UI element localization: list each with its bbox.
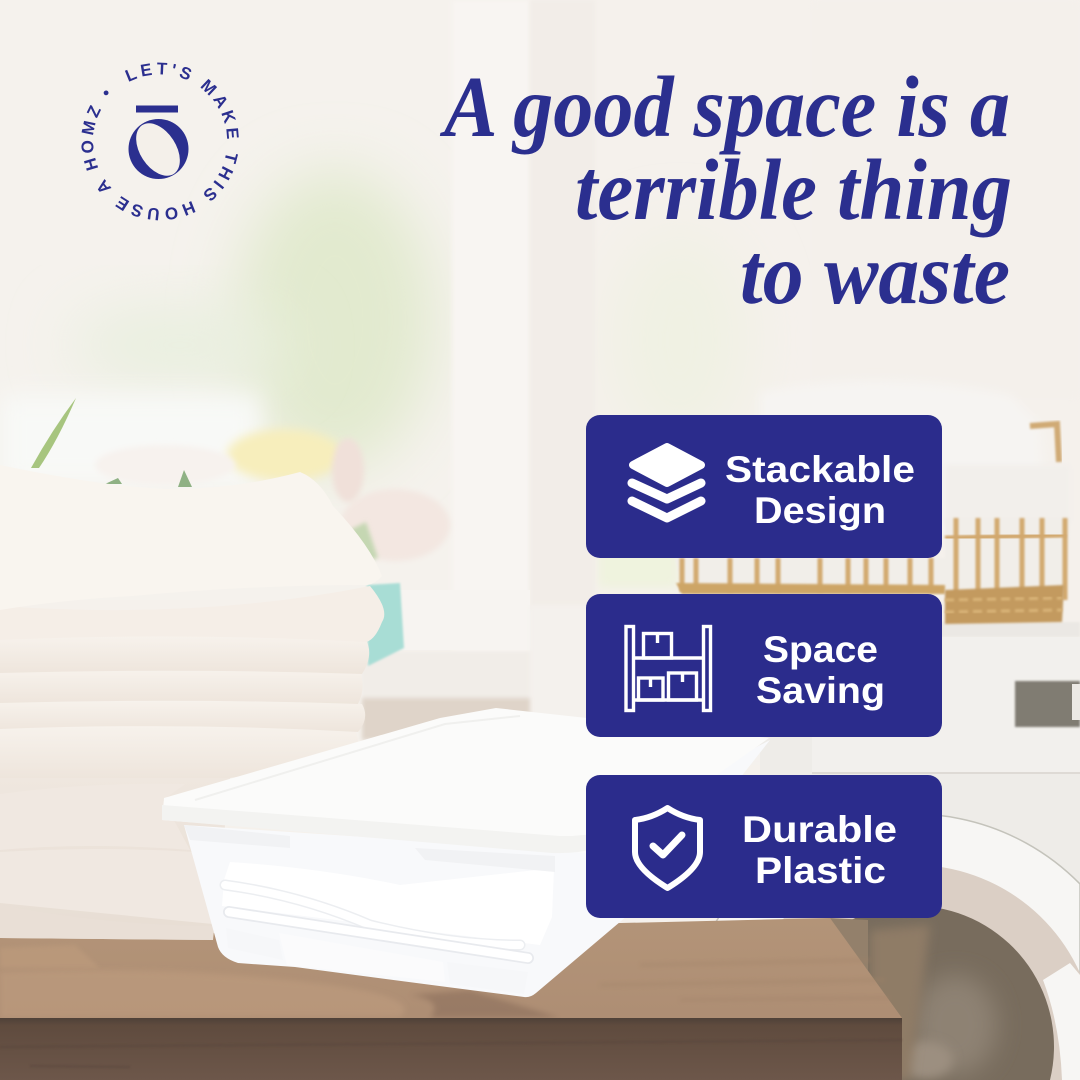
icon: stacked layers — [632, 447, 701, 518]
icon: warehouse shelf with boxes — [626, 626, 710, 710]
folded white sheets — [222, 862, 554, 958]
label — [756, 629, 885, 711]
label: Design — [754, 490, 886, 531]
box body — [184, 740, 770, 997]
box handles — [226, 928, 528, 994]
panel: space saving — [586, 594, 942, 737]
label: Space — [763, 629, 878, 670]
headline: A good space is a — [439, 58, 1010, 155]
headline — [439, 58, 1012, 322]
label — [742, 809, 897, 891]
headline: terrible thing — [575, 141, 1012, 238]
logo badge — [81, 62, 239, 220]
washing machine — [679, 622, 1080, 1080]
table — [0, 918, 902, 1080]
label: Plastic — [755, 850, 886, 891]
icon: shield with check — [635, 808, 700, 888]
label: Durable — [742, 809, 897, 850]
label: Stackable — [725, 449, 915, 490]
stack of folded towels — [0, 465, 384, 940]
box lid — [162, 708, 769, 872]
laundry basket — [675, 381, 1070, 624]
logo ring text: LET'S MAKE THIS HOUSE A HOMZ • — [81, 62, 239, 220]
panel: durable plastic — [586, 775, 942, 918]
logo mark — [127, 106, 189, 184]
label: Saving — [756, 670, 885, 711]
label — [725, 449, 915, 531]
headline: to waste — [740, 225, 1010, 322]
plastic storage box with white sheets — [162, 708, 770, 997]
flowers and vase — [31, 398, 450, 666]
panel: stackable design — [586, 415, 942, 558]
